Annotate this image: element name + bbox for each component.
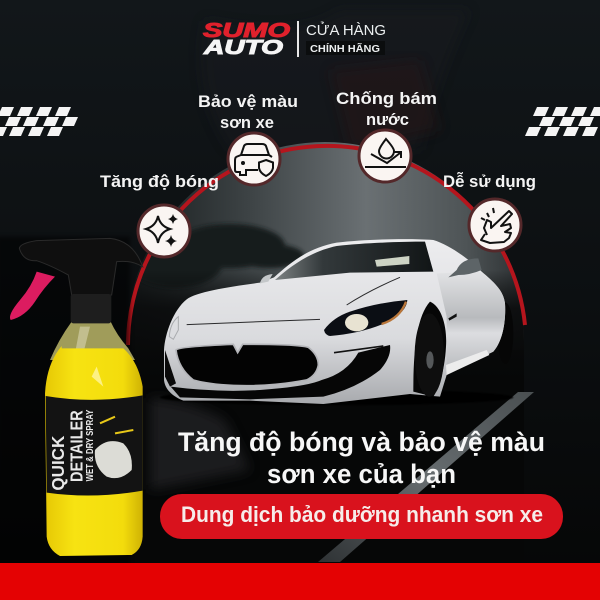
logo [203, 20, 386, 59]
lower intake [171, 345, 390, 399]
right mirror [448, 258, 482, 277]
trigger [10, 272, 55, 320]
headlight orange stripe [382, 302, 406, 324]
front wheel [415, 313, 444, 397]
label: sơn xe [220, 113, 274, 132]
store label background [306, 41, 385, 55]
label: Bảo vệ màu [198, 92, 298, 111]
black backdrop behind bottle [0, 237, 130, 570]
left vent [165, 350, 176, 387]
store label line 2: CHÍNH HÃNG [310, 42, 380, 55]
benefit: bao ve mau son xe [198, 92, 298, 185]
car [160, 239, 513, 405]
headlight [324, 300, 407, 336]
bottom red band [0, 563, 600, 600]
label [198, 92, 298, 132]
hood crease lines [187, 277, 400, 325]
product bottle [0, 237, 143, 570]
label: Dễ sử dụng [443, 172, 536, 191]
checker flag left [0, 107, 78, 136]
rear wheel [497, 303, 513, 364]
label [336, 89, 437, 129]
icon: water drop repelled [359, 130, 411, 182]
label text: QUICK [48, 436, 68, 491]
icon: car with shield [228, 133, 280, 185]
grille [176, 344, 318, 386]
callout pill [160, 494, 563, 539]
label text: DETAILER [66, 410, 86, 482]
label illustration: sponge [95, 441, 132, 478]
headline: Tăng độ bóng và bảo vệ màu [178, 427, 545, 457]
label band [46, 395, 143, 496]
windshield reflection [375, 256, 409, 267]
car body [164, 239, 505, 404]
logo wordmark AUTO: AUTO [203, 37, 284, 59]
icon: sparkles [138, 205, 190, 257]
headline: sơn xe của bạn [267, 459, 456, 489]
logo divider [297, 21, 299, 57]
benefit: tang do bong [100, 172, 219, 257]
label text: WET & DRY SPRAY [85, 409, 96, 481]
callout pill: Dung dịch bảo dưỡng nhanh sơn xe [181, 502, 543, 527]
side door handle [448, 313, 457, 321]
store label line 1: CỬA HÀNG [306, 21, 386, 39]
side skirt [446, 350, 489, 375]
benefit: chong bam nuoc [336, 89, 437, 182]
red arc connecting benefits [128, 146, 525, 345]
label text [48, 409, 96, 491]
headlight lamp [345, 314, 368, 331]
left fog lamp [169, 317, 178, 339]
label: Tăng độ bóng [100, 172, 219, 191]
icon: finger snap hand [469, 199, 521, 251]
clear shoulder [50, 322, 135, 360]
road stripe [318, 392, 534, 562]
headline [178, 427, 545, 489]
windshield [275, 242, 433, 280]
label: nước [366, 110, 409, 129]
intake slit [334, 346, 383, 353]
liquid highlight [92, 367, 103, 387]
front wheel arch [413, 302, 446, 397]
label: Chống bám [336, 89, 437, 108]
label accent [100, 417, 133, 433]
benefit: de su dung [443, 172, 536, 251]
yellow liquid [45, 346, 143, 556]
logo wordmark SUMO: SUMO [203, 20, 291, 42]
spray head [19, 238, 143, 295]
car side panel [437, 272, 505, 374]
cap [71, 294, 111, 323]
checker flag right [525, 107, 600, 136]
left mirror [260, 274, 273, 283]
shoulder glass highlight [75, 327, 90, 353]
